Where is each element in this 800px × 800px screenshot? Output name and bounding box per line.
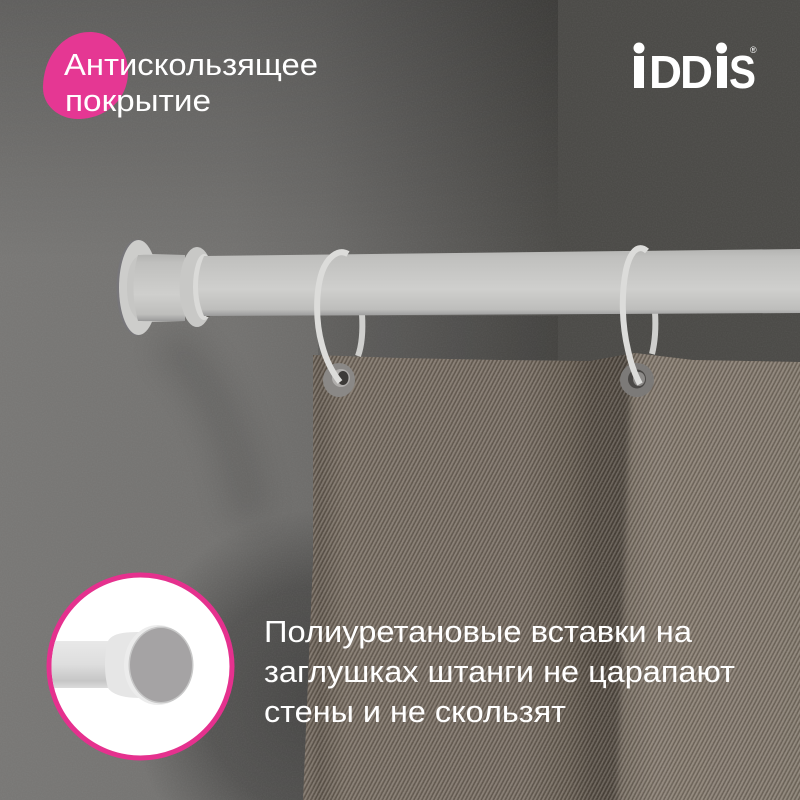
grommet left (323, 363, 355, 397)
pink blob (43, 32, 128, 119)
description text: стены и не скользят (264, 694, 566, 729)
logo: ® (750, 45, 757, 55)
curtain rod (198, 249, 800, 316)
back of curtain rings (358, 312, 655, 356)
detail circle (40, 575, 232, 758)
curtain (300, 330, 800, 800)
heading: Антискользящее (64, 47, 318, 82)
logo: S (729, 46, 756, 98)
description text: заглушках штанги не царапают (264, 654, 735, 689)
curtain ring right (623, 248, 647, 384)
curtain ring left (317, 252, 348, 382)
description text: Полиуретановые вставки на (264, 614, 693, 649)
heading: покрытие (65, 83, 211, 118)
logo: D (649, 46, 682, 98)
grommet right (620, 363, 654, 397)
wall mount of the rod (116, 240, 216, 336)
logo (634, 42, 757, 98)
logo: D (680, 46, 713, 98)
